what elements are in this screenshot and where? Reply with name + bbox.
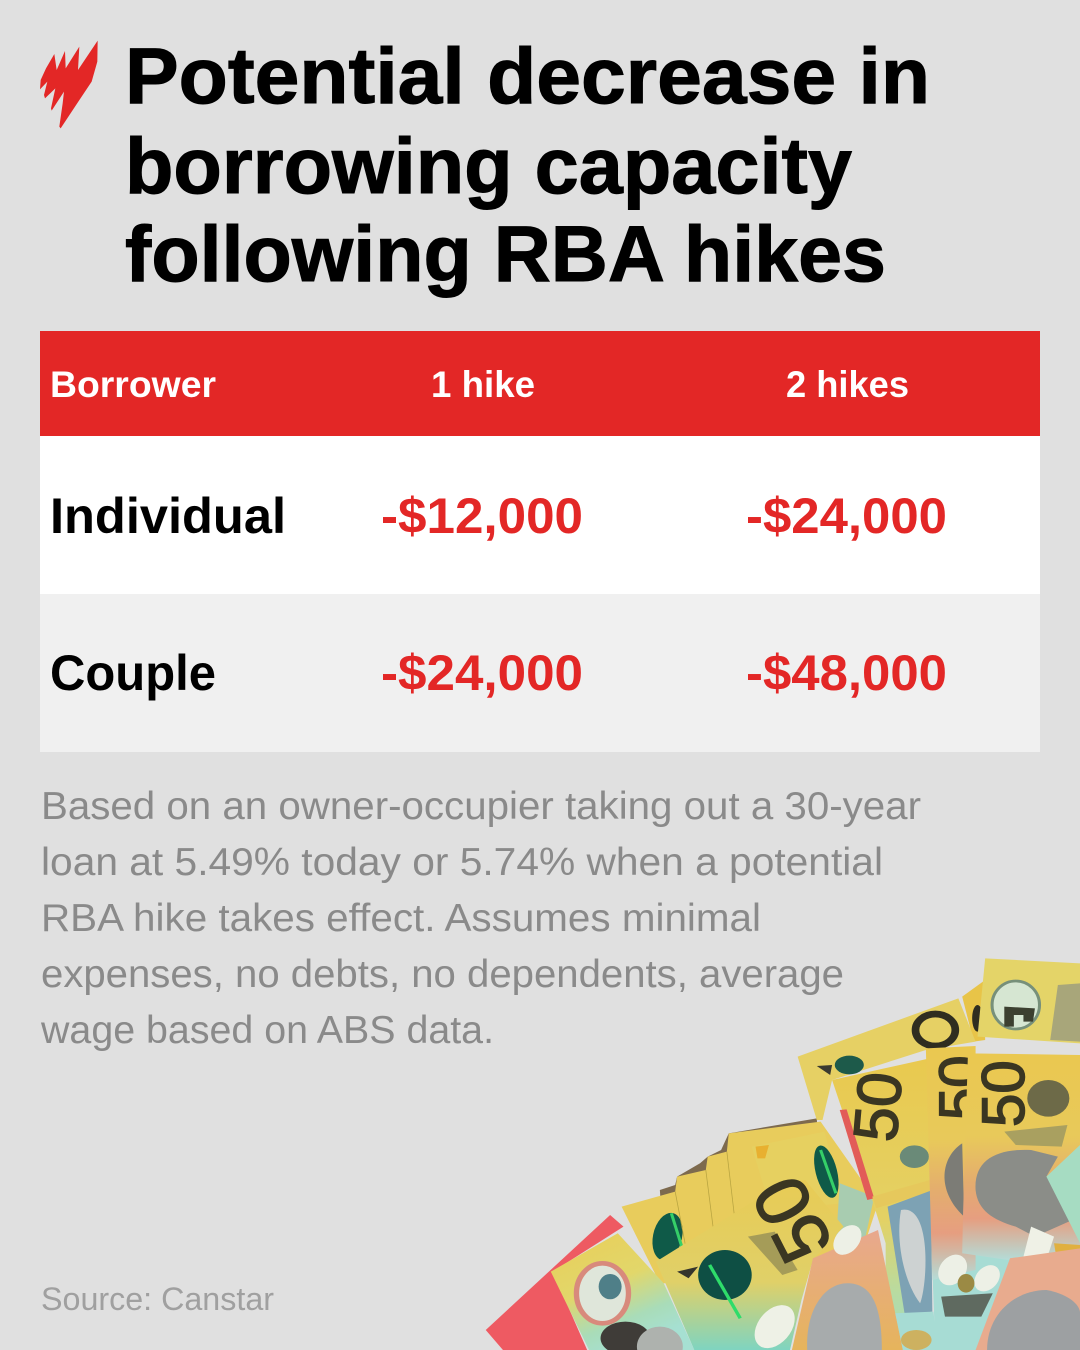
- bee motifs: [828, 1221, 1005, 1350]
- note: front right: [962, 1053, 1080, 1260]
- methodology note: Based on an owner-occupier taking out a 30-year: [41, 785, 921, 828]
- title: following RBA hikes: [125, 209, 886, 298]
- table header row: Borrower: [50, 364, 216, 405]
- methodology note: expenses, no debts, no dependents, average: [41, 953, 844, 996]
- table header row: [40, 331, 1040, 436]
- table header row: 1 hike: [431, 364, 535, 405]
- methodology note: loan at 5.49% today or 5.74% when a potential: [41, 841, 883, 884]
- methodology note: wage based on ABS data.: [40, 1009, 494, 1052]
- table row: couple: -$48,000: [746, 645, 947, 701]
- table: [40, 331, 1040, 752]
- note: top right corner: [978, 958, 1080, 1043]
- note: centre hologram with large 50: [656, 1180, 844, 1350]
- note: bottom right portrait: [976, 1248, 1080, 1350]
- note: bottom left portrait: [792, 1230, 937, 1350]
- table row: individual: [40, 436, 1040, 594]
- table header row: 2 hikes: [786, 364, 909, 405]
- cropped 50 on tall note: 50: [928, 1055, 993, 1120]
- table row: individual: Individual: [50, 488, 286, 544]
- note: emblem left: [551, 1233, 694, 1350]
- table row: couple: -$24,000: [381, 645, 583, 701]
- illustration: fan of fifty dollar notes: [486, 958, 1080, 1350]
- source: Source: Canstar: [41, 1281, 274, 1317]
- table row: individual: -$12,000: [381, 488, 583, 544]
- table row: individual: -$24,000: [746, 488, 947, 544]
- note: upper tilted: [798, 980, 985, 1120]
- 50 on middle note: 50: [841, 1070, 916, 1144]
- title: borrowing capacity: [125, 121, 852, 210]
- methodology note: RBA hike takes effect. Assumes minimal: [41, 897, 761, 940]
- back notes: red and yellow stack: [486, 1118, 878, 1350]
- title: [125, 31, 930, 298]
- table row: couple: Couple: [50, 645, 216, 701]
- icon: SBS logo: [40, 41, 98, 128]
- methodology note: [40, 785, 921, 1052]
- note: middle with red strip: [832, 1058, 932, 1350]
- table row: couple: [40, 594, 1040, 752]
- large 50 on centre note: 50: [736, 1163, 848, 1276]
- 50 on front note: 50: [970, 1060, 1037, 1127]
- note: tall with cropped 50: [926, 1046, 1016, 1350]
- title: Potential decrease in: [125, 31, 930, 120]
